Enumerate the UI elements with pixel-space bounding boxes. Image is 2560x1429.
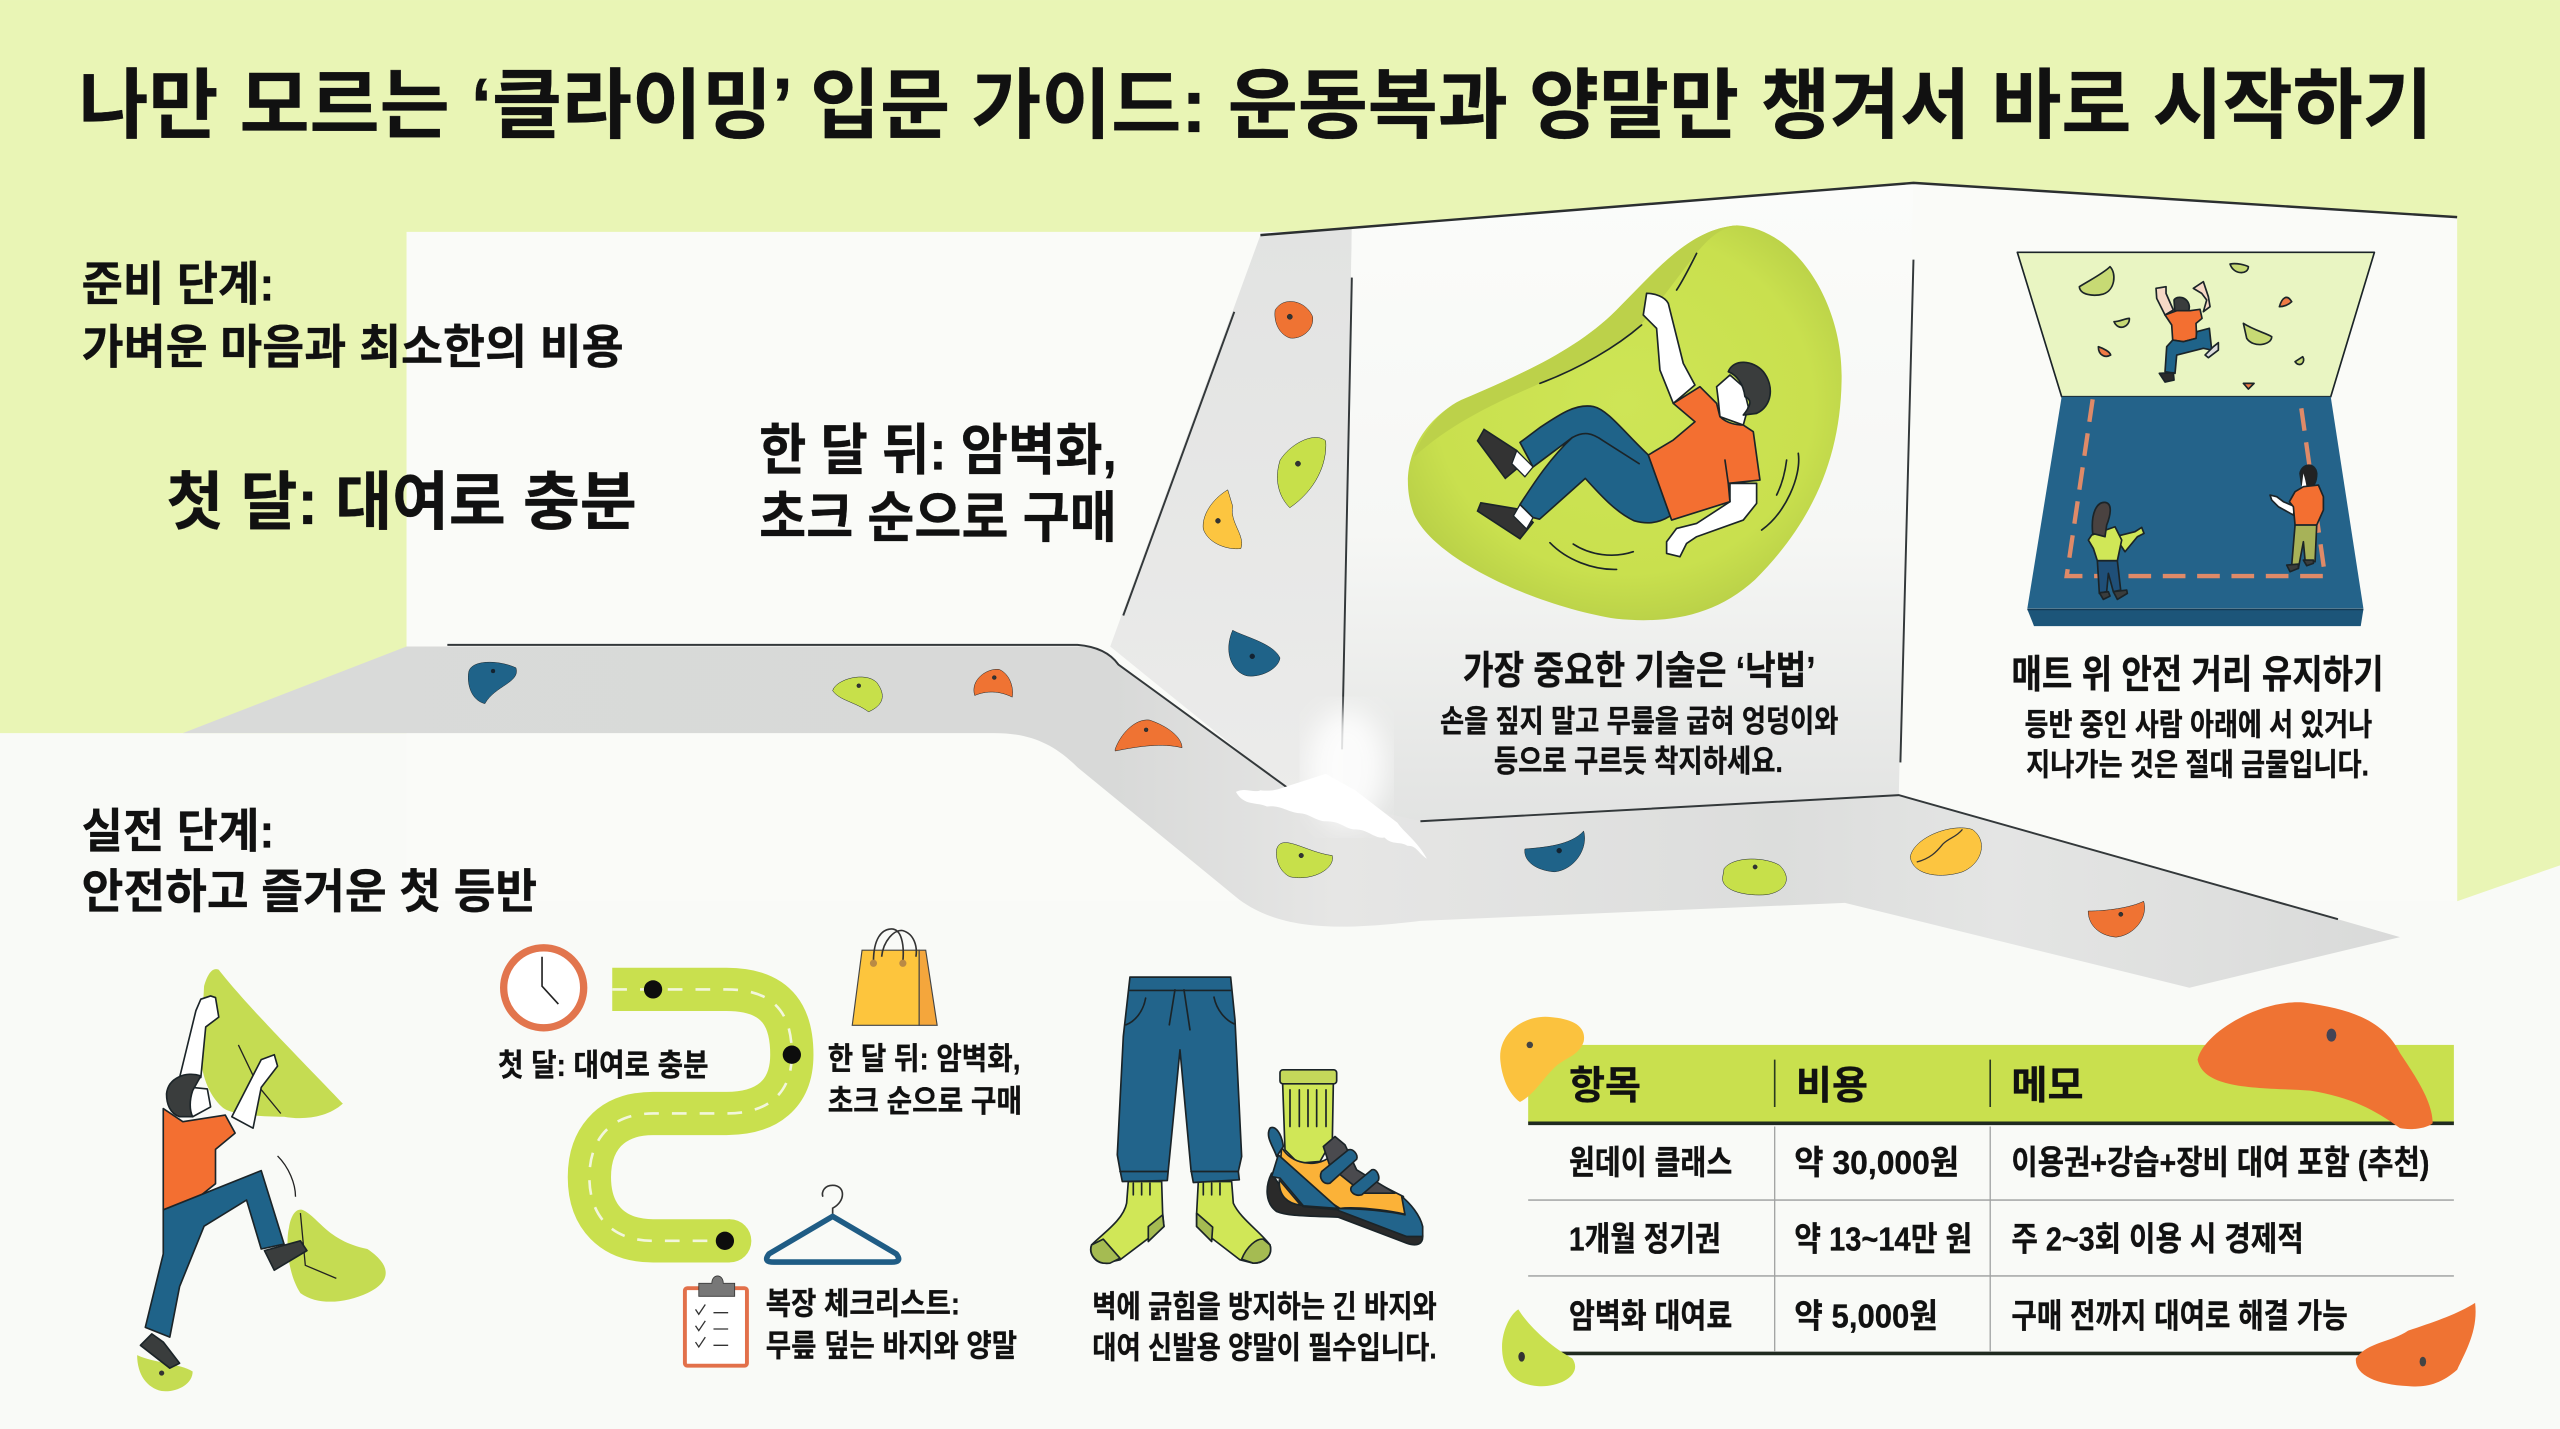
- road labels: 한 달 뒤: 암벽화,: [828, 1041, 1020, 1076]
- table rows: 약 30,000원: [1794, 1145, 1959, 1182]
- socks: [1091, 1182, 1271, 1263]
- road labels: 복장 체크리스트:: [766, 1286, 960, 1321]
- table rows: 암벽화 대여료: [1569, 1298, 1732, 1335]
- table header: 메모: [2011, 1065, 2084, 1108]
- table rows: 원데이 클래스: [1569, 1145, 1732, 1182]
- table holds: [1500, 1002, 2476, 1387]
- icon: hanger: [767, 1185, 899, 1262]
- icon: clipboard: [685, 1276, 747, 1366]
- text: after one month: [759, 419, 1117, 549]
- icon: clock: [504, 948, 584, 1028]
- road labels: [498, 1041, 1022, 1364]
- panel text: falling: 가장 중요한 기술은 ‘낙법’: [1463, 650, 1816, 693]
- wall holds: [2079, 264, 2304, 389]
- panel text: mat: [2011, 654, 2384, 783]
- text: after one month: 초크 순으로 구매: [759, 487, 1117, 549]
- table rows: 1개월 정기권: [1569, 1222, 1721, 1259]
- clothing caption: [1092, 1290, 1437, 1365]
- panel text: mat: 매트 위 안전 거리 유지하기: [2011, 654, 2384, 697]
- table rows: [1569, 1145, 2429, 1335]
- figure: spotter man: [2270, 465, 2323, 572]
- table rows: 약 5,000원: [1794, 1298, 1938, 1335]
- illustration: mat safety distance: [2017, 252, 2374, 626]
- sock and shoe: [1267, 1070, 1423, 1245]
- road path: [589, 980, 801, 1262]
- panel text: mat: 지나가는 것은 절대 금물입니다.: [2026, 748, 2369, 783]
- panel text: mat: 등반 중인 사람 아래에 서 있거나: [2024, 708, 2372, 743]
- heading: practice stage: 실전 단계:: [82, 805, 274, 858]
- clothing caption: 벽에 긁힘을 방지하는 긴 바지와: [1092, 1290, 1437, 1325]
- heading: practice stage: 안전하고 즐거운 첫 등반: [82, 866, 537, 919]
- heading: preparation stage: 준비 단계:: [82, 258, 274, 311]
- heading: preparation stage: [82, 258, 624, 374]
- illustration: pants, socks and shoe: [1091, 977, 1423, 1263]
- table rows: 주 2~3회 이용 시 경제적: [2011, 1222, 2304, 1259]
- figure: climber: [140, 996, 307, 1368]
- text: after one month: 한 달 뒤: 암벽화,: [759, 419, 1117, 481]
- title: 나만 모르는 ‘클라이밍’ 입문 가이드: 운동복과 양말만 챙겨서 바로 시작하기: [78, 64, 2433, 149]
- panel text: falling: 등으로 구르듯 착지하세요.: [1494, 744, 1783, 779]
- panel: climbing wall: [183, 183, 2457, 988]
- chalk mark: [1236, 774, 1427, 859]
- table header: [1569, 1065, 2084, 1108]
- panel text: falling: 손을 짚지 말고 무릎을 굽혀 엉덩이와: [1440, 704, 1838, 739]
- road labels: 무릎 덮는 바지와 양말: [766, 1329, 1017, 1364]
- climbing holds on wall: [468, 301, 2145, 937]
- road labels: 첫 달: 대여로 충분: [498, 1048, 709, 1083]
- heading: practice stage: [82, 805, 537, 919]
- table rows: 약 13~14만 원: [1794, 1222, 1972, 1259]
- heading: preparation stage: 가벼운 마음과 최소한의 비용: [82, 321, 624, 374]
- icon: shopping bag: [852, 929, 937, 1025]
- table header: 비용: [1796, 1065, 1868, 1108]
- figure: falling climber: [1478, 253, 1799, 569]
- pants: [1117, 977, 1242, 1183]
- figure: top climber: [2156, 282, 2218, 382]
- panel text: falling: [1440, 650, 1838, 779]
- text: first month: 첫 달: 대여로 충분: [167, 467, 637, 538]
- table rows: 이용권+강습+장비 대여 포함 (추천): [2011, 1145, 2429, 1182]
- cost table: [1500, 1002, 2476, 1387]
- illustration: falling technique: [1408, 225, 1842, 620]
- road labels: 초크 순으로 구매: [828, 1084, 1022, 1119]
- clothing caption: 대여 신발용 양말이 필수입니다.: [1092, 1330, 1437, 1365]
- illustration: climber on holds: [137, 969, 386, 1391]
- table header: 항목: [1569, 1065, 1641, 1108]
- table rows: 구매 전까지 대여로 해결 가능: [2011, 1298, 2348, 1335]
- figure: spotter woman: [2088, 502, 2144, 599]
